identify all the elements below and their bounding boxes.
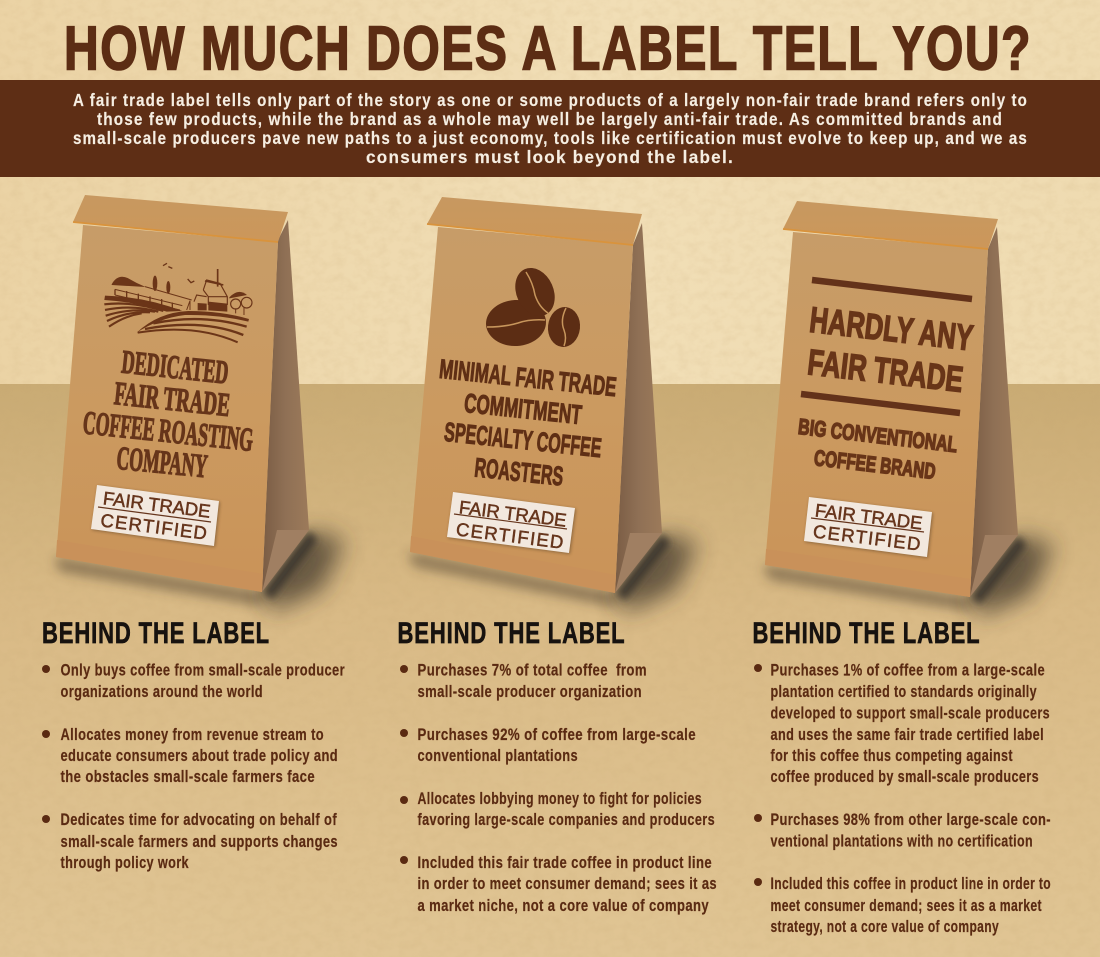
bag 3 label text: BIG CONVENTIONAL (797, 414, 959, 457)
column 2 bullet text: Included this fair trade coffee in product line (418, 853, 712, 872)
bag 2 label text: ROASTERS (473, 452, 565, 492)
bag 3 rule bottom (801, 394, 960, 413)
column 3 bullet text (770, 661, 1051, 936)
bag 3 fair trade certified sticker: CERTIFIED (812, 521, 922, 555)
column 3 bullet text: for this coffee thus competing against (770, 746, 1013, 765)
column 3: behind the label (752, 617, 1051, 936)
background: paper wall (0, 0, 1100, 384)
intro text (73, 90, 1028, 167)
bag 3 rule top (812, 280, 972, 299)
bag 2 fair trade certified sticker (447, 492, 576, 554)
column 1: behind the label (42, 617, 345, 872)
column 2 bullet text: Purchases 92% of coffee from large-scale (418, 725, 696, 744)
column 2 bullet text: Purchases 7% of total coffee from (418, 661, 647, 680)
column 2 bullet text (418, 661, 717, 915)
bag 2 label text (438, 354, 618, 492)
column 1 bullet text (60, 661, 345, 872)
bag 1 label text: COFFEE ROASTING (81, 405, 255, 459)
bag 3 label text: HARDLY ANY (808, 299, 975, 358)
bag 2 label text: COMMITMENT (463, 388, 584, 430)
bag 3 label text (797, 299, 975, 484)
column 1 bullet text: small-scale farmers and supports changes (60, 832, 338, 851)
column 3 bullet text: strategy, not a core value of company (770, 917, 999, 936)
bag 2 fair trade certified sticker: CERTIFIED (455, 518, 565, 553)
column 1 bullet text: Only buys coffee from small-scale producer (60, 661, 345, 680)
bag 3: big conventional brand (763, 201, 1054, 617)
icon: farm landscape (104, 263, 252, 342)
column 2 bullet dots (400, 665, 408, 864)
column 1 bullet text: Allocates money from revenue stream to (60, 725, 324, 744)
bag 1 label text (81, 345, 255, 485)
column 2 bullet text: Allocates lobbying money to fight for policies (418, 789, 702, 808)
bag 3 label text: COFFEE BRAND (813, 445, 937, 484)
column 1 bullet text: through policy work (60, 853, 189, 872)
bag 1: dedicated fair trade roaster (54, 195, 345, 612)
bag 2 fair trade certified sticker: FAIR TRADE (458, 496, 568, 531)
column 1 bullet text: Dedicates time for advocating on behalf of (60, 810, 337, 829)
bag 2 label text: MINIMAL FAIR TRADE (438, 354, 618, 402)
column 2: behind the label: BEHIND THE LABEL (398, 617, 626, 650)
column 1 bullet text: organizations around the world (60, 682, 263, 701)
column 1 bullet text: educate consumers about trade policy and (60, 746, 338, 765)
background: table surface (0, 384, 1100, 957)
bag 2: minimal commitment specialty roasters (408, 197, 698, 613)
intro text: consumers must look beyond the label. (366, 147, 734, 167)
bag 1 label text: COMPANY (115, 441, 209, 485)
column 3 bullet dots (754, 664, 762, 886)
column 3: behind the label: BEHIND THE LABEL (752, 617, 980, 650)
column 1: behind the label: BEHIND THE LABEL (42, 617, 270, 650)
column 1 bullet text: the obstacles small-scale farmers face (60, 767, 315, 786)
bag 1 label text: DEDICATED (120, 345, 230, 392)
bag 1 label text: FAIR TRADE (112, 376, 232, 424)
bag 1 fair trade certified sticker: FAIR TRADE (102, 487, 212, 522)
bag 2 label text: SPECIALTY COFFEE (443, 417, 603, 463)
column 2 bullet text: conventional plantations (418, 746, 578, 765)
column 2 bullet text: a market niche, not a core value of company (418, 896, 709, 915)
icon: coffee beans (485, 262, 582, 349)
bag 3 fair trade certified sticker (804, 497, 933, 558)
bag 3 fair trade certified sticker: FAIR TRADE (814, 500, 924, 534)
intro band (0, 80, 1100, 177)
bag 3 label text: FAIR TRADE (806, 341, 965, 400)
column 2 bullet text: in order to meet consumer demand; sees it as (418, 874, 717, 893)
column 1 bullet dots (42, 665, 50, 823)
bag 1 fair trade certified sticker: CERTIFIED (99, 509, 208, 544)
column 2 bullet text: favoring large-scale companies and producers (418, 810, 715, 829)
bag 1 fair trade certified sticker (91, 485, 220, 547)
column 2 bullet text: small-scale producer organization (418, 682, 642, 701)
column 2: behind the label (398, 617, 717, 915)
